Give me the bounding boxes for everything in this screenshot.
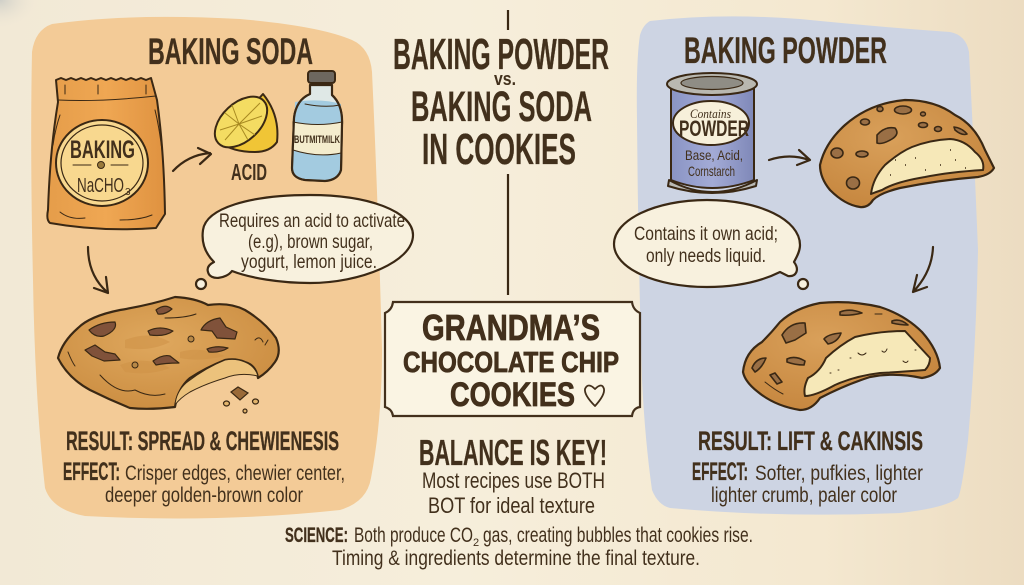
icon: baking soda bag xyxy=(47,78,165,229)
callout: requires an acid: Requires an acid to activate xyxy=(219,210,405,232)
text: science note: Timing & ingredients determine the final texture. xyxy=(332,547,700,570)
label: baking badge: 3 xyxy=(125,187,131,198)
icon: lemon xyxy=(205,87,277,157)
callout: requires an acid: yogurt, lemon juice. xyxy=(241,251,377,273)
text: science note: Both produce CO xyxy=(354,524,473,547)
label: acid: ACID xyxy=(231,159,267,185)
banner: grandma's cookies: GRANDMA’S xyxy=(422,307,600,348)
text: result spread and chewiness: RESULT: SPREAD & CHEWIENESIS xyxy=(66,426,339,456)
arrow: bag to acid xyxy=(173,148,211,171)
arrow: cookie to result xyxy=(913,247,933,292)
text: effect right line one: Softer, pufkies, lighter xyxy=(755,462,923,485)
label: baking badge xyxy=(56,120,148,206)
label: baking badge: NaCHO xyxy=(77,175,124,197)
label: powder: POWDER xyxy=(679,116,749,141)
text: effect line one: Crisper edges, chewier center, xyxy=(125,462,345,485)
text: effect right line two: lighter crumb, paler color xyxy=(711,484,897,507)
illustration: chewy spread cookie xyxy=(58,297,279,409)
callout: contains its own acid: only needs liquid. xyxy=(646,245,766,267)
panel: baking soda xyxy=(31,17,413,518)
callout: contains its own acid: Contains it own acid; xyxy=(634,223,778,245)
text: effect label: EFFECT: xyxy=(63,458,120,486)
icon: powder can xyxy=(667,73,757,193)
icon: heart xyxy=(585,386,604,406)
label: baking badge: BAKING xyxy=(70,136,135,164)
callout: requires an acid xyxy=(196,195,413,289)
text: science note: SCIENCE: xyxy=(285,524,348,547)
text: balance is key: BOT for ideal texture xyxy=(428,493,595,518)
icon: buttermilk bottle xyxy=(292,71,342,181)
panel: baking powder xyxy=(614,16,994,515)
heading: baking powder: BAKING POWDER xyxy=(684,30,887,71)
label: powder xyxy=(673,101,749,145)
arrow: bag to cookie xyxy=(88,247,108,293)
text: effect line two: deeper golden-brown color xyxy=(105,484,303,507)
banner: grandma's cookies xyxy=(385,302,640,416)
text: science note xyxy=(285,524,753,570)
icon: crumbs xyxy=(224,387,258,413)
title: IN COOKIES xyxy=(422,125,576,174)
banner: grandma's cookies: COOKIES xyxy=(450,376,575,414)
heading: baking soda: BAKING SODA xyxy=(148,31,313,72)
label: powder: Contains xyxy=(690,106,731,121)
title xyxy=(393,30,609,174)
icon: powder can: Base, Acid, xyxy=(685,147,743,163)
illustration: puffy cookie xyxy=(820,100,994,207)
text: balance is key: BALANCE IS KEY! xyxy=(419,432,607,473)
callout: requires an acid: (e.g), brown sugar, xyxy=(248,231,373,253)
title: BAKING SODA xyxy=(411,83,592,131)
title: vs. xyxy=(494,69,516,89)
callout: contains its own acid xyxy=(614,200,808,289)
illustration: cakey cookie xyxy=(743,302,940,410)
title: BAKING POWDER xyxy=(393,30,609,79)
text: science note: gas, creating bubbles that cookies rise. xyxy=(483,524,753,547)
arrow: can to cookie xyxy=(769,150,810,165)
text: effect label right: EFFECT: xyxy=(692,458,748,486)
text: science note: 2 xyxy=(473,537,479,549)
icon: buttermilk bottle: BUTMITMILK xyxy=(294,134,340,146)
text: balance is key: Most recipes use BOTH xyxy=(422,468,605,493)
text: balance is key xyxy=(419,432,607,518)
banner: grandma's cookies: CHOCOLATE CHIP xyxy=(403,347,619,379)
icon: powder can: Cornstarch xyxy=(688,163,735,179)
